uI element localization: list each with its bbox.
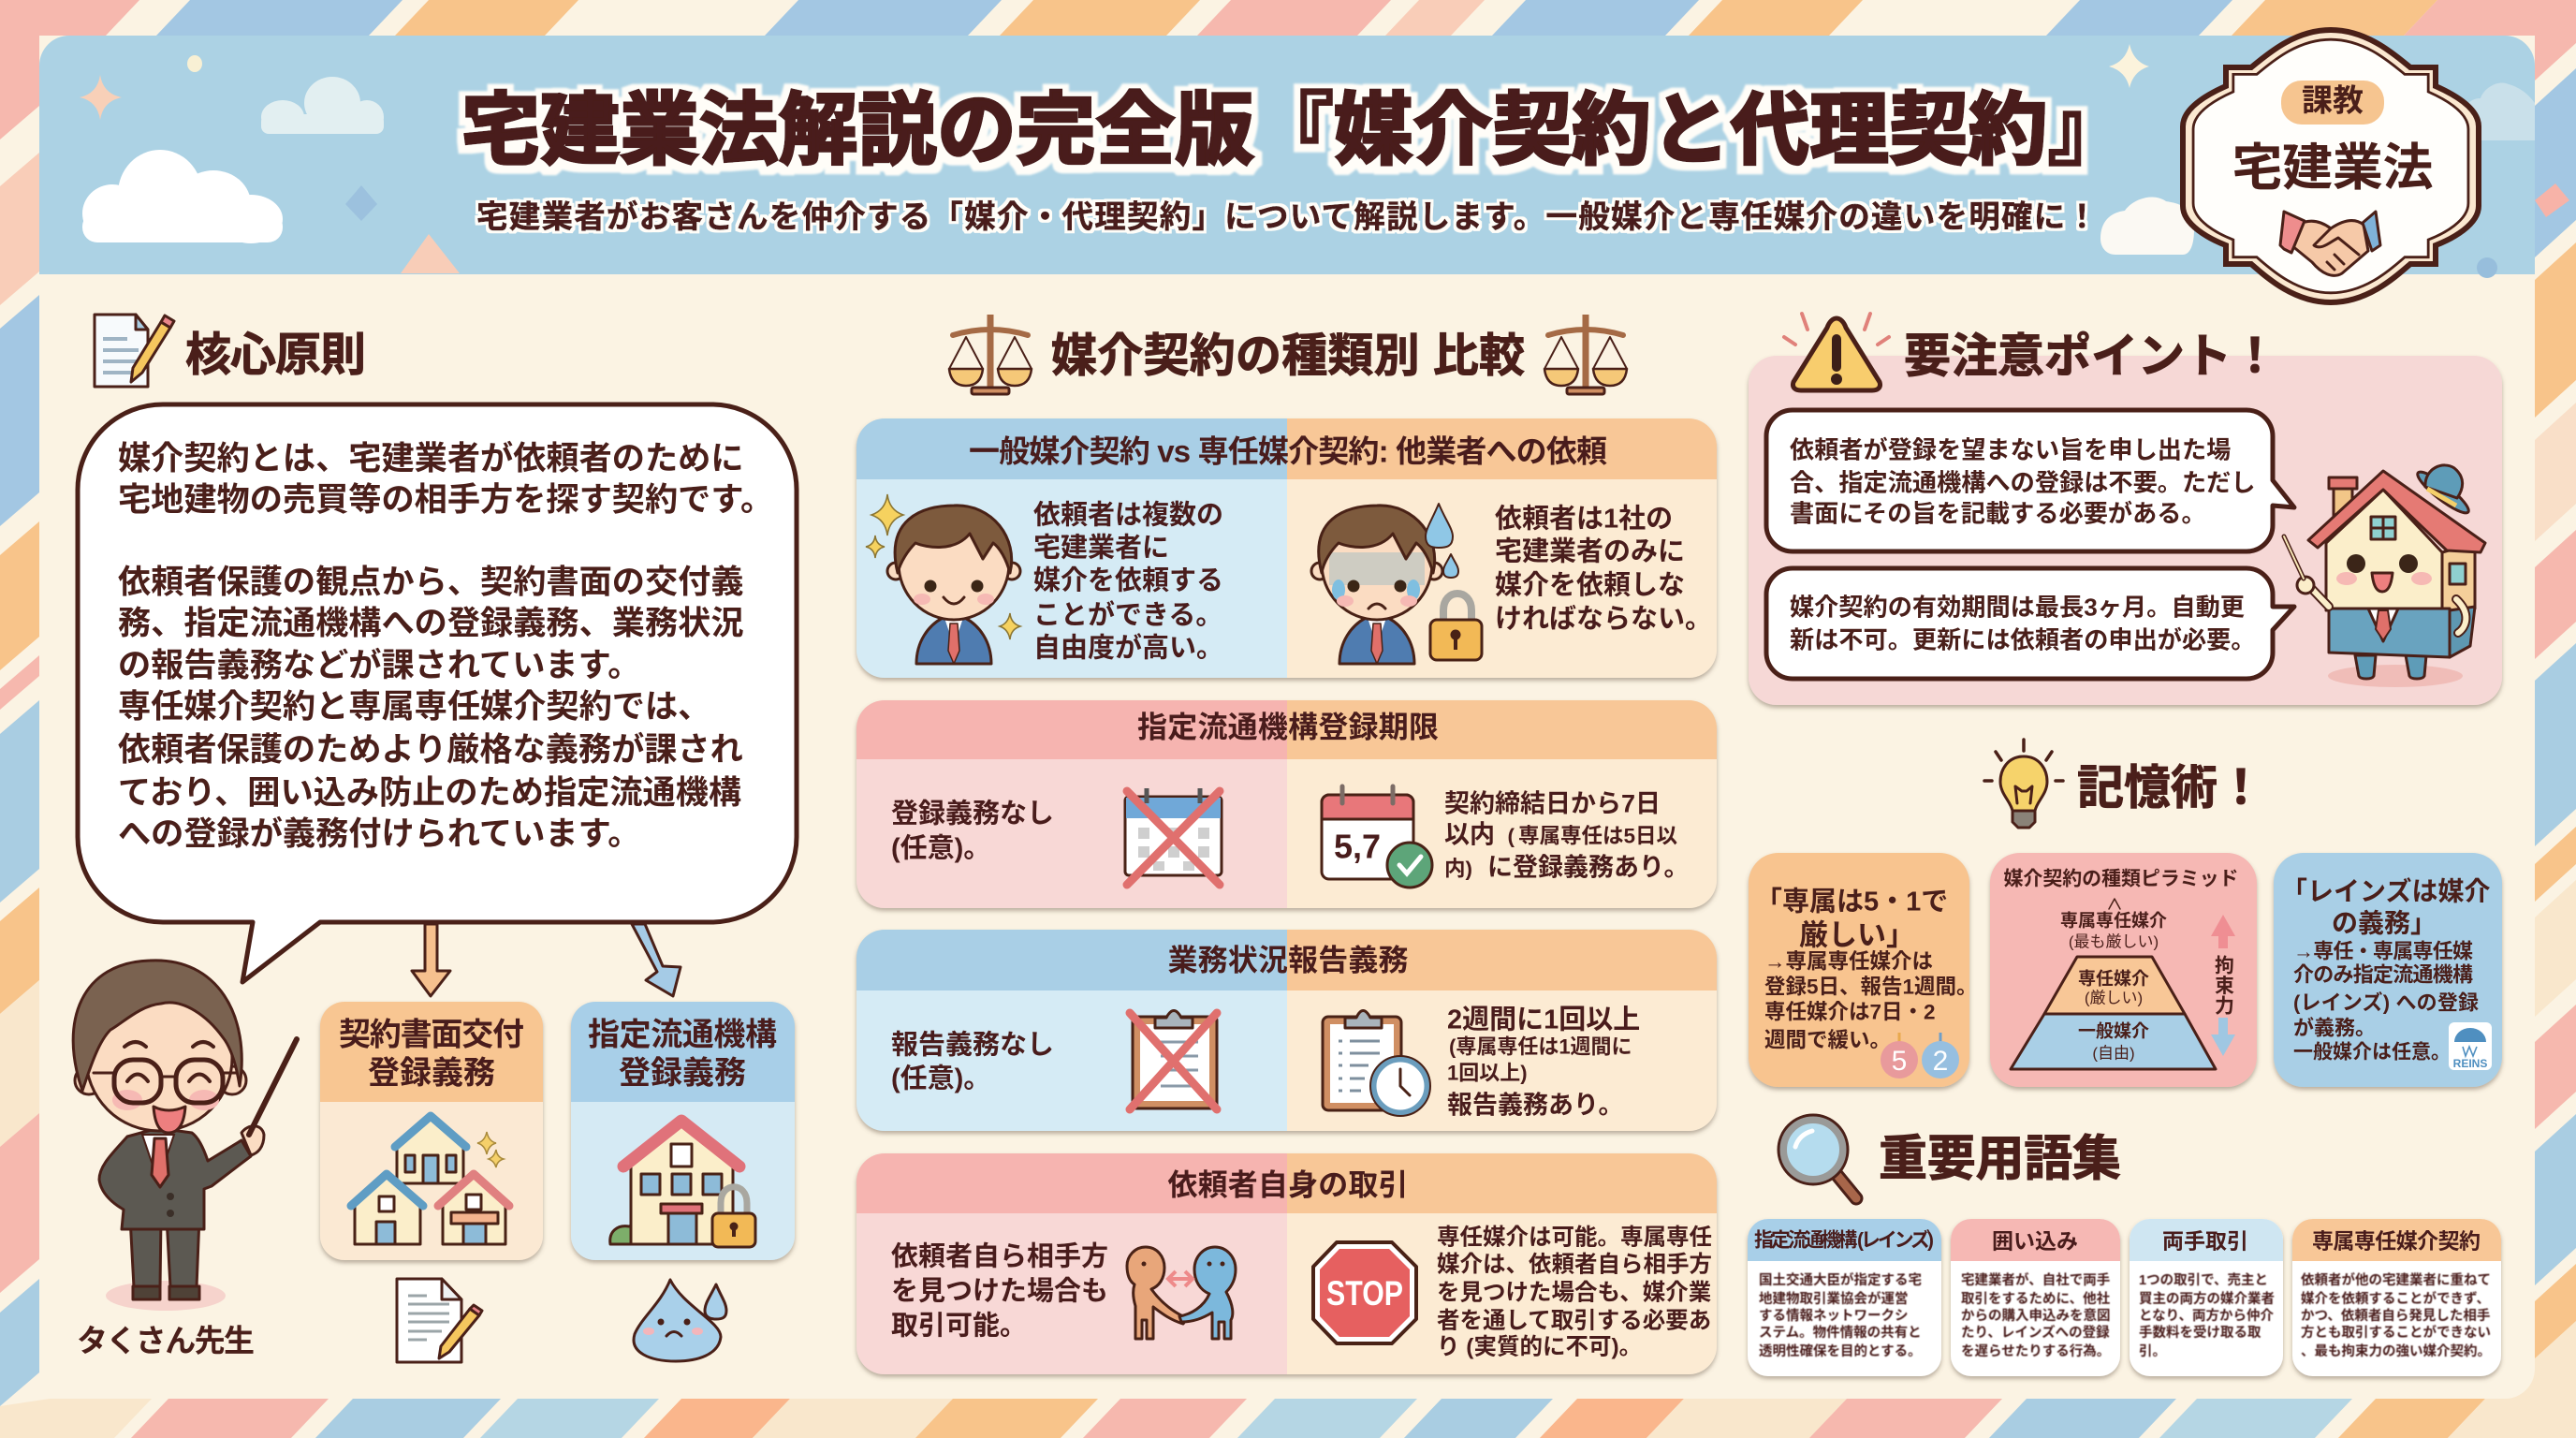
- illustration: two figures shaking hands: [1127, 1247, 1236, 1339]
- left text: 媒介を依頼する: [1033, 565, 1223, 595]
- icon: stop sign: STOP: [1326, 1274, 1403, 1313]
- card title: 業務状況報告義務: [1168, 944, 1408, 977]
- dot: [187, 55, 202, 72]
- term text: かつ、依頼者自ら発見した相手: [2301, 1307, 2490, 1324]
- right text: [1444, 790, 1689, 882]
- left text: を見つけた場合も: [891, 1275, 1108, 1307]
- heading: 核心原則: [185, 330, 366, 380]
- illustration: happy boy: [866, 494, 1020, 664]
- right text: 1回以上): [1447, 1062, 1528, 1084]
- arrow: orange: [412, 924, 450, 996]
- left text: 依頼者自ら相手方: [891, 1241, 1108, 1271]
- term card: 囲い込み: 囲い込み: [1992, 1228, 2078, 1253]
- right text: 報告義務あり。: [1447, 1092, 1623, 1120]
- term text: 、最も拘束力の強い媒介契約。: [2301, 1343, 2491, 1359]
- card: 専属は5・1で厳しい: [1749, 853, 1978, 1087]
- right text: [1437, 1225, 1712, 1359]
- icon: document with pencil: [397, 1279, 482, 1362]
- illustration: house mascot: [2284, 465, 2485, 687]
- card: レインズは媒介の義務: が義務。: [2293, 1017, 2376, 1039]
- card title: 指定流通機構: [588, 1017, 777, 1052]
- badge: 2: [1922, 1033, 1959, 1078]
- term text: 透明性確保を目的とする。: [1759, 1343, 1922, 1359]
- logo: REINS: [2449, 1022, 2492, 1070]
- term text: 宅建業者が、自社で両手: [1961, 1271, 2110, 1288]
- bubble text: [118, 440, 773, 852]
- term text: 手数料を受け取る取: [2139, 1324, 2261, 1341]
- card: 専属は5・1で厳しい: 「専属は5・1で: [1755, 886, 1948, 917]
- term text: たり、レインズへの登録: [1961, 1324, 2110, 1341]
- bubble text: 媒介契約とは、宅建業者が依頼者のために: [118, 440, 744, 477]
- card: 媒介契約の種類ピラミッド: (厳しい): [2085, 989, 2143, 1007]
- icon: warning triangle: [1784, 314, 1889, 390]
- left text: 自由度が高い。: [1033, 631, 1223, 663]
- icon: sad water drop: [634, 1280, 726, 1361]
- icon: stop sign: [1313, 1242, 1416, 1343]
- term text: 方とも取引することができない: [2301, 1324, 2491, 1341]
- cloud: large white: [82, 150, 283, 243]
- term card: 囲い込み: [1951, 1219, 2120, 1376]
- comparison card: 指定流通機構登録期限: [856, 700, 1717, 908]
- card: 専属は5・1で厳しい: 週間で緩い。: [1764, 1028, 1891, 1052]
- card: 専属は5・1で厳しい: 登録5日、報告1週間。: [1764, 976, 1978, 998]
- card: レインズは媒介の義務: の義務」: [2332, 908, 2437, 938]
- term card: 専属専任媒介契約: [2292, 1219, 2501, 1376]
- left text: 取引可能。: [891, 1311, 1027, 1341]
- left text: [891, 798, 1054, 863]
- right text: 者を通して取引する必要あ: [1437, 1307, 1711, 1333]
- card: 契約書面交付 登録義務: [320, 1002, 543, 1260]
- section heading: 重要用語集: [1778, 1115, 2121, 1198]
- right text: 媒介は、依頼者自ら相手方: [1437, 1251, 1712, 1277]
- term text: [1961, 1271, 2111, 1359]
- pyramid: [2011, 957, 2216, 1069]
- icon: scales right: [1544, 315, 1627, 394]
- section heading: 記憶術: [1984, 740, 2264, 828]
- badge: 5: [1881, 1033, 1918, 1078]
- term text: となり、両方から仲介: [2139, 1307, 2274, 1324]
- card: 媒介契約の種類ピラミッド: [1990, 853, 2257, 1087]
- comparison card: 依頼者自身の取引: [856, 1153, 1717, 1374]
- card: 媒介契約の種類ピラミッド: 専任媒介: [2078, 968, 2149, 989]
- card title: [588, 1017, 777, 1092]
- card: レインズは媒介の義務: (レインズ) への登録: [2293, 990, 2479, 1015]
- card: レインズは媒介の義務: 「レインズは媒介: [2281, 876, 2490, 906]
- section: 核心原則: [95, 315, 366, 387]
- badge: 5: 5: [1892, 1046, 1907, 1077]
- arrow: down: [2211, 1018, 2235, 1056]
- subtitle: 宅建業者がお客さんを仲介する「媒介・代理契約」について解説します。一般媒介と専任媒介の違いを明確に！: [476, 199, 2098, 235]
- card: 媒介契約の種類ピラミッド: 一般媒介: [2078, 1020, 2149, 1041]
- label: 拘束力: 拘束力: [2213, 955, 2234, 1015]
- icon: document and pencil: [95, 315, 174, 387]
- left text: [891, 1030, 1054, 1093]
- card title: [339, 1017, 524, 1092]
- bubble 1: [1766, 410, 2294, 551]
- right text: 依頼者は1社の: [1495, 504, 1673, 534]
- heading: 媒介契約の種類別 比較: [1051, 331, 1525, 382]
- triangle: [401, 234, 460, 273]
- card: 専属は5・1で厳しい: 専任媒介は7日・2: [1764, 1000, 1936, 1024]
- term card: 両手取引: 両手取引: [2162, 1228, 2248, 1253]
- comparison card: 業務状況報告義務: [856, 930, 1717, 1131]
- icon: crossed-out calendar: [1125, 788, 1222, 885]
- card: 専属は5・1で厳しい: 厳しい」: [1799, 919, 1915, 951]
- term text: [1759, 1271, 1922, 1359]
- left text: 依頼者は複数の: [1033, 500, 1223, 530]
- right text: 2週間に1回以上: [1447, 1004, 1640, 1035]
- right text: 以内 (専属専任は5日以: [1444, 820, 1678, 848]
- cloud: behind badge lower: [2100, 197, 2194, 255]
- icon: handshake: [2280, 212, 2380, 275]
- speech bubble: core principle: [78, 404, 797, 982]
- term text: を遅らせたりする行為。: [1961, 1343, 2110, 1359]
- card: レインズは媒介の義務: →専任・専属専任媒: [2293, 940, 2473, 962]
- left text: [891, 1241, 1108, 1341]
- bubble text: 宅地建物の売買等の相手方を探す契約です。: [118, 481, 773, 519]
- illustration: worried boy with lock: [1311, 504, 1482, 664]
- card: レインズは媒介の義務: [2274, 853, 2502, 1087]
- term text: からの購入申込みを意図: [1961, 1307, 2110, 1324]
- left text: [1033, 500, 1223, 663]
- heading: 記憶術！: [2077, 762, 2264, 814]
- right text: [1447, 1004, 1640, 1120]
- card title: 一般媒介契約 vs 専任媒介契約: 他業者への依頼: [969, 434, 1607, 468]
- badge label: 課教: [2302, 82, 2364, 118]
- dot: blue: [2477, 257, 2497, 278]
- right text: [1495, 504, 1712, 635]
- term text: 依頼者が他の宅建業者に重ねて: [2301, 1271, 2491, 1288]
- label: タくさん先生: タくさん先生: [77, 1324, 255, 1357]
- card: 専属は5・1で厳しい: →専属専任媒介は: [1764, 949, 1933, 974]
- bubble text: 専任媒介契約と専属専任媒介契約では、: [118, 689, 710, 725]
- badge main text: 宅建業法: [2232, 140, 2434, 197]
- card title: 指定流通機構登録期限: [1137, 710, 1439, 743]
- illustration: house with lock: [610, 1121, 755, 1247]
- left text: 宅建業者に: [1033, 532, 1169, 564]
- bubble text: ており、囲い込み防止のため指定流通機構: [118, 775, 741, 811]
- card: 指定流通機構 登録義務: [571, 1002, 795, 1260]
- right text: 宅建業者のみに: [1495, 536, 1685, 567]
- arrow: up: [2211, 915, 2235, 948]
- badge: 2: 2: [1933, 1046, 1948, 1077]
- term card: 指定流通機構(レインズ): 指定流通機構 (レインズ): [1754, 1228, 1934, 1251]
- right text: 専任媒介は可能。専属専任: [1437, 1225, 1712, 1251]
- card title: 登録義務: [619, 1056, 746, 1092]
- term card: 専属専任媒介契約: 専属専任媒介契約: [2312, 1228, 2481, 1253]
- left text: 報告義務なし: [891, 1030, 1054, 1060]
- term text: する情報ネットワークシ: [1759, 1307, 1908, 1324]
- bubble 1: 合、指定流通機構への登録は不要。ただし: [1790, 468, 2256, 496]
- card title: 契約書面交付: [339, 1017, 524, 1052]
- term text: [2301, 1271, 2491, 1359]
- bubble text: 務、指定流通機構への登録義務、業務状況: [118, 605, 744, 642]
- card: 媒介契約の種類ピラミッド: (最も厳しい): [2069, 932, 2159, 951]
- bubble text: の報告義務などが課されています。: [118, 648, 640, 683]
- card title: 登録義務: [368, 1056, 495, 1092]
- diamond: [345, 185, 377, 221]
- panel: 要注意ポイント: [1749, 314, 2502, 705]
- cloud: pale: [261, 77, 384, 134]
- term card: 指定流通機構(レインズ): [1748, 1219, 1941, 1376]
- bubble 1: 依頼者が登録を望まない旨を申し出た場: [1790, 436, 2231, 464]
- card: レインズは媒介の義務: 一般媒介は任意。: [2293, 1041, 2451, 1064]
- icon: calendar with check: [1322, 786, 1432, 888]
- right text: り (実質的に不可)。: [1437, 1333, 1642, 1359]
- bubble 2: [1766, 568, 2294, 679]
- card: レインズは媒介の義務: 介のみ指定流通機構: [2293, 962, 2473, 987]
- left text: 登録義務なし: [891, 798, 1054, 829]
- title: 宅建業法解説の完全版『媒介契約と代理契約』: [461, 86, 2127, 174]
- right text: 内) に登録義務あり。: [1444, 854, 1689, 882]
- bubble 2: 新は不可。更新には依頼者の申出が必要。: [1790, 625, 2256, 653]
- heading: 重要用語集: [1879, 1133, 2121, 1187]
- icon: clipboard with clock: [1323, 1011, 1430, 1116]
- card: 媒介契約の種類ピラミッド: 専属専任媒介: [2060, 910, 2167, 931]
- sparkle: cream: [2109, 44, 2149, 88]
- card: 媒介契約の種類ピラミッド: (自由): [2092, 1045, 2135, 1062]
- icon: scales left: [949, 315, 1032, 394]
- panel: header banner: [39, 36, 2535, 278]
- term text: 1つの取引で、売主と: [2139, 1271, 2268, 1288]
- badge pill: [2281, 81, 2384, 125]
- left text: (任意)。: [891, 833, 990, 863]
- bubble 2: 媒介契約の有効期間は最長3ヶ月。自動更: [1790, 594, 2245, 622]
- arrow: blue: [632, 924, 681, 996]
- section heading: 媒介契約の種類別 比較: [949, 315, 1627, 394]
- term text: [2139, 1271, 2275, 1359]
- term text: 国土交通大臣が指定する宅: [1759, 1271, 1922, 1288]
- right text: ければならない。: [1495, 603, 1712, 635]
- illustration: three houses: [351, 1116, 509, 1244]
- comparison card: 一般媒介 vs 専任媒介: [856, 418, 1717, 678]
- sparkle: peach: [80, 75, 122, 120]
- badge: 宅建業法: [2183, 30, 2479, 302]
- bubble text: 依頼者保護の観点から、契約書面の交付義: [118, 564, 744, 601]
- bubble 1: 書面にその旨を記載する必要がある。: [1790, 500, 2206, 528]
- bubble text: への登録が義務付けられています。: [118, 816, 640, 852]
- left text: (任意)。: [891, 1064, 990, 1093]
- right text: (専属専任は1週間に: [1449, 1035, 1632, 1058]
- cloud: behind badge upper: [2462, 82, 2535, 140]
- term card: 両手取引: [2130, 1219, 2283, 1376]
- card: 媒介契約の種類ピラミッド: 媒介契約の種類ピラミッド: [2003, 869, 2239, 889]
- right text: を見つけた場合も、媒介業: [1437, 1279, 1711, 1305]
- icon: crossed-out clipboard: [1130, 1011, 1217, 1109]
- icon: calendar with check: 5,7: [1334, 828, 1381, 865]
- term text: 媒介を依頼することができず、: [2301, 1290, 2490, 1307]
- icon: magnifier: [1778, 1115, 1856, 1198]
- term text: 引。: [2139, 1343, 2166, 1359]
- term text: ステム。物件情報の共有と: [1759, 1324, 1922, 1341]
- right text: 媒介を依頼しな: [1495, 569, 1685, 601]
- term text: 買主の両方の媒介業者: [2139, 1290, 2275, 1307]
- term text: 取引をするために、他社: [1961, 1291, 2111, 1307]
- card title: 依頼者自身の取引: [1168, 1168, 1408, 1202]
- heading: 要注意ポイント！: [1904, 330, 2278, 382]
- logo: REINS: REINS: [2453, 1057, 2487, 1070]
- term text: 地建物取引業協会が運営: [1759, 1290, 1908, 1307]
- right text: 契約締結日から7日: [1444, 790, 1661, 818]
- icon: lightbulb: [1984, 740, 2063, 828]
- left text: ことができる。: [1033, 599, 1222, 631]
- bubble text: 依頼者保護のためより厳格な義務が課され: [118, 732, 743, 768]
- illustration: teacher タくさん先生: [73, 961, 297, 1311]
